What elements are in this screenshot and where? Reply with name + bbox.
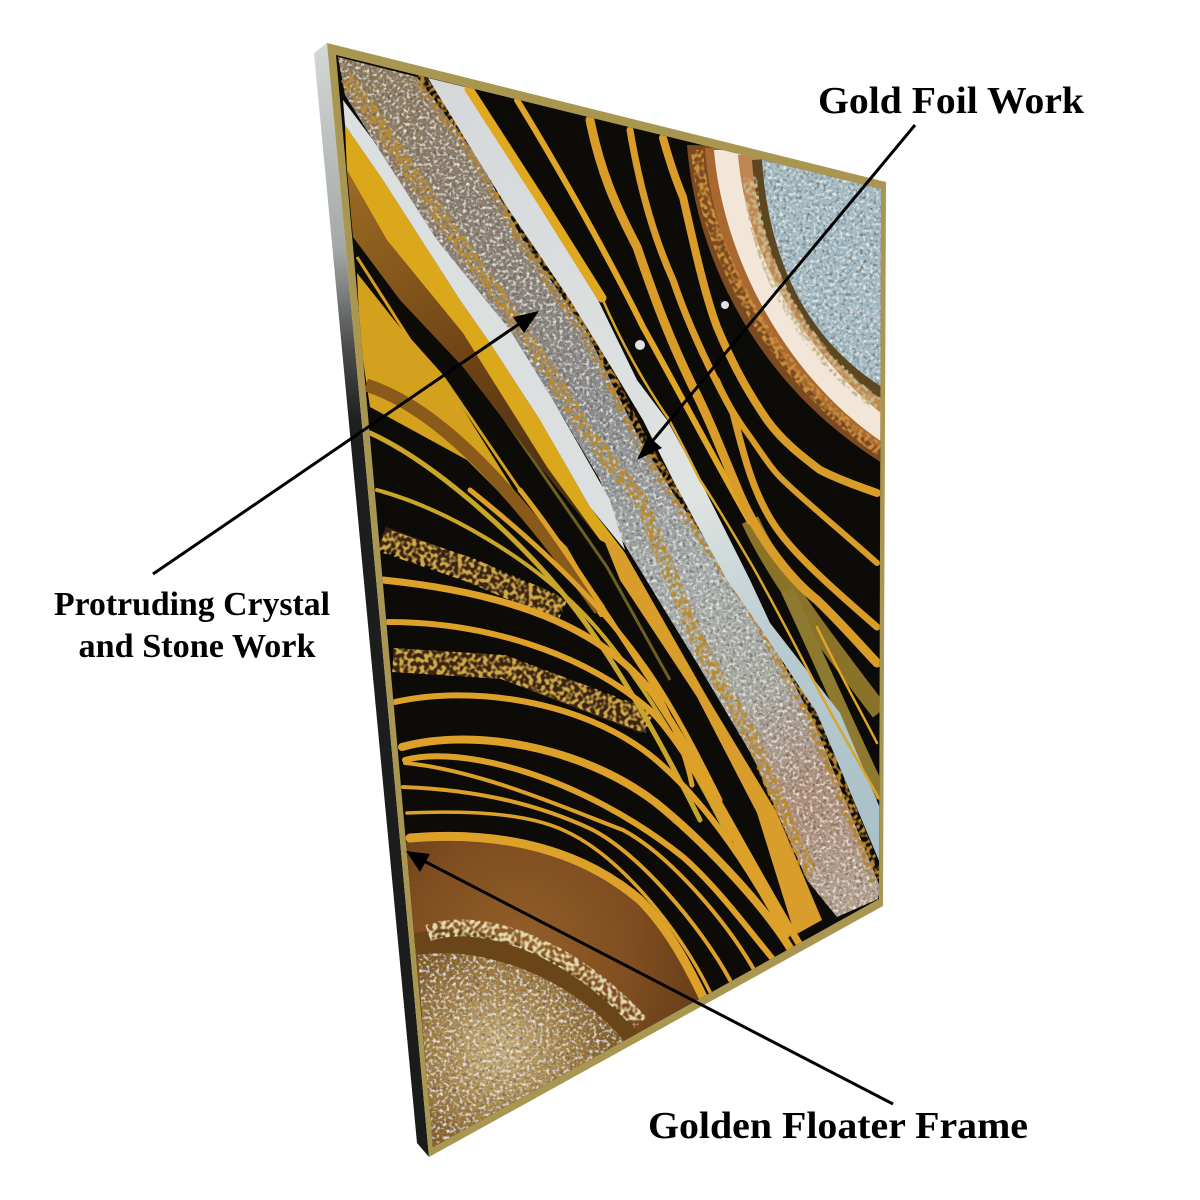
dark ring around crystal <box>415 942 630 1040</box>
stone clusters with brown base <box>382 537 650 722</box>
gold stones right of band <box>417 77 878 880</box>
label: golden floater frame: Golden Floater Frame <box>648 1105 1028 1147</box>
canvas artwork <box>330 50 890 1180</box>
gold stones left of band <box>347 77 810 875</box>
thick gold stripe <box>600 530 822 935</box>
right white and blue stripe <box>428 78 882 868</box>
golden frame front <box>327 43 886 1157</box>
upper gold wedge <box>345 125 625 553</box>
inner pale stones <box>750 177 878 405</box>
gold line beside white stripe <box>469 89 602 298</box>
outer gold stones <box>697 150 880 450</box>
brown shading on lower wedge <box>366 385 600 610</box>
frame side edge <box>314 43 429 1157</box>
label: protruding crystal and stone work: Protruding Crystal <box>54 586 330 623</box>
arrow: golden floater frame <box>406 851 893 1104</box>
gold foil stripes upper right <box>517 100 882 797</box>
label: protruding crystal and stone work: and Stone Work <box>78 628 316 665</box>
top right blue crystal circle <box>687 145 890 463</box>
gold foil fan lines lower <box>370 433 800 992</box>
label: gold foil work: Gold Foil Work <box>818 80 1085 122</box>
thin gold line <box>602 298 880 800</box>
left white stripe <box>343 100 625 550</box>
left gold wedge lower <box>357 273 607 617</box>
label: protruding crystal and stone work <box>54 586 330 665</box>
arrow: gold foil work <box>637 125 915 460</box>
thin gold line above lower wedge <box>357 257 520 490</box>
arrow: crystal and stone work <box>153 311 539 574</box>
crystal band <box>338 57 880 917</box>
olive streak <box>501 416 672 681</box>
bottom left gold crystal <box>418 953 624 1147</box>
framed painting <box>314 43 890 1180</box>
bottom left copper circle <box>404 838 703 1150</box>
pale stone arc <box>428 928 640 1023</box>
upper brown wedge <box>345 125 625 553</box>
paint drops <box>635 340 645 350</box>
thick gold arc over copper <box>410 836 703 997</box>
olive gold swathes <box>750 520 880 712</box>
